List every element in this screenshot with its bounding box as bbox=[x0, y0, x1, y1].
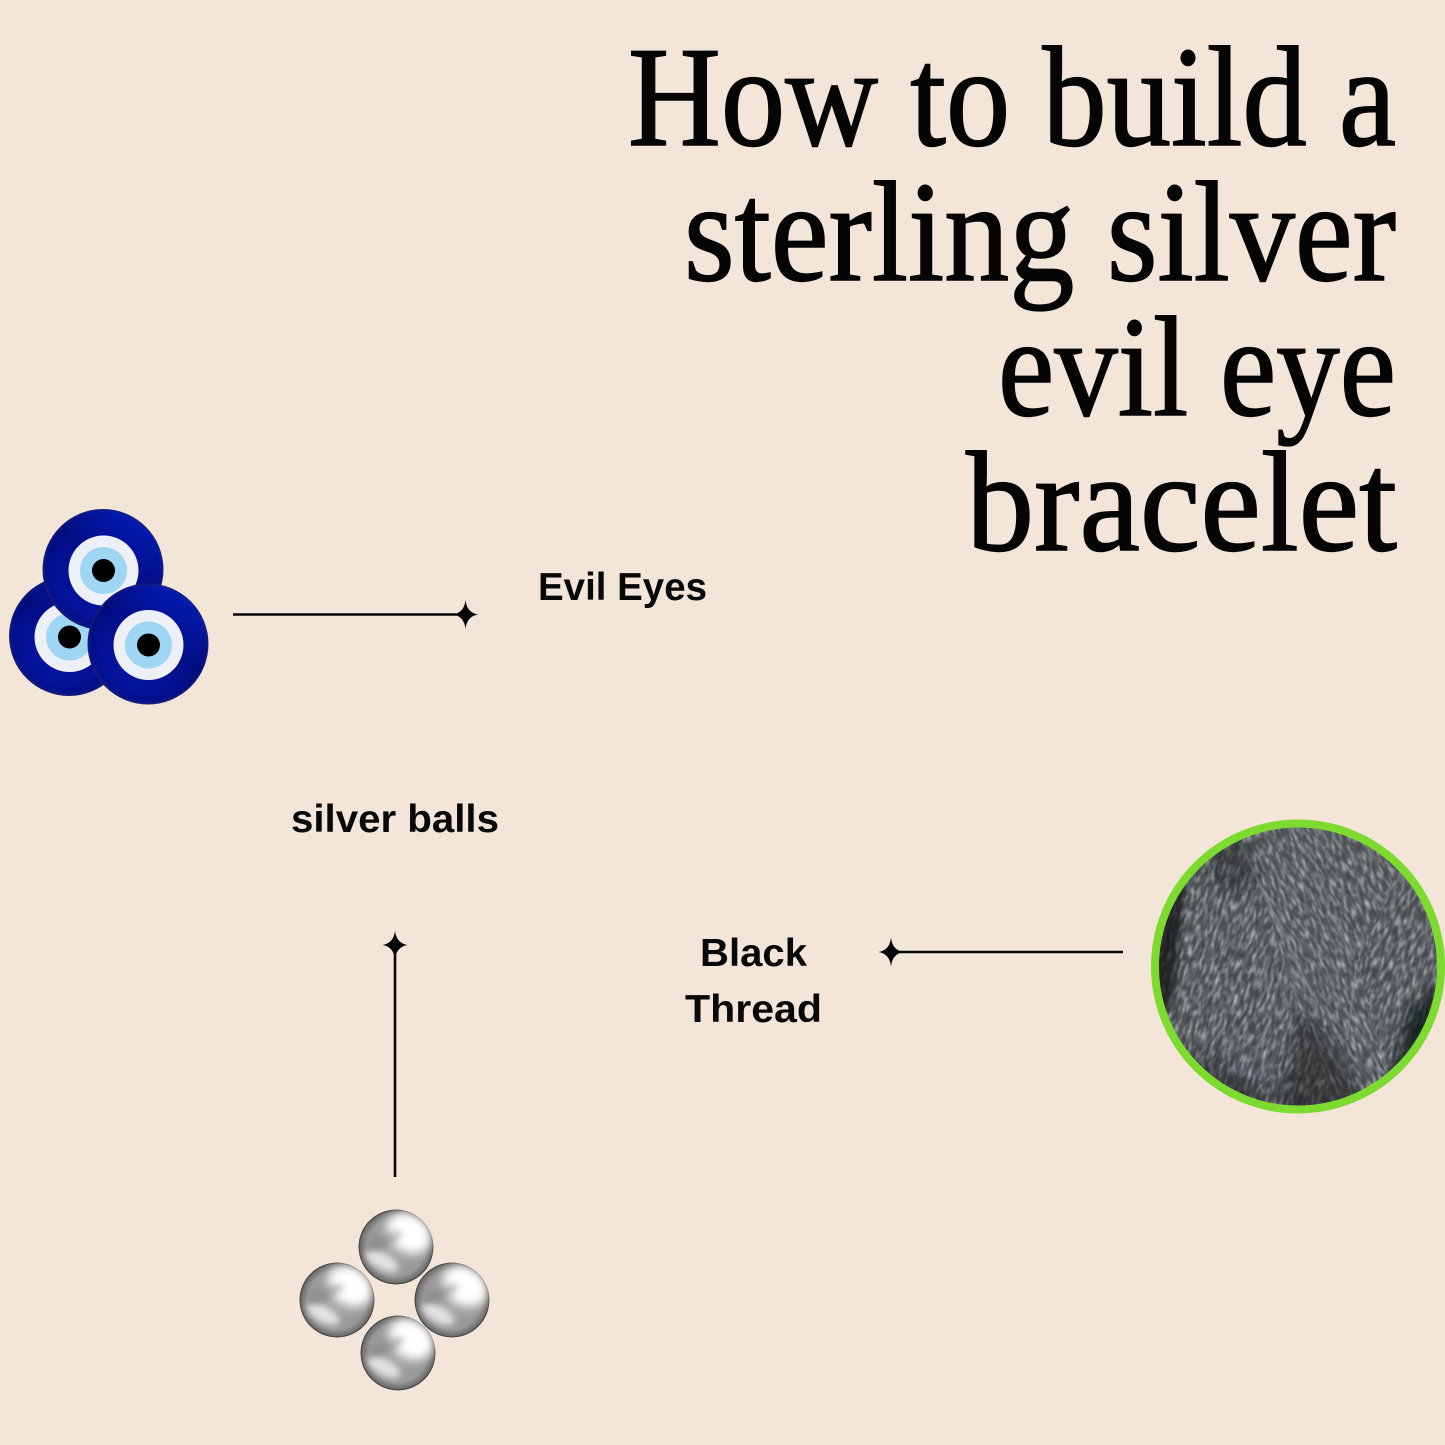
label: silver balls: silver balls bbox=[291, 798, 499, 841]
bead: left bbox=[9, 576, 129, 696]
icon: black thread spool bbox=[1151, 820, 1445, 1114]
bead: right bbox=[88, 584, 208, 704]
label: black thread bbox=[685, 932, 822, 1031]
title: sterling silver bbox=[684, 153, 1396, 311]
label: evil eyes: Evil Eyes bbox=[538, 566, 707, 609]
title bbox=[628, 18, 1397, 581]
arrow: evil eyes bbox=[233, 600, 478, 629]
arrow: black thread bbox=[878, 938, 1123, 966]
green ring bbox=[1155, 824, 1441, 1110]
label: black thread: Thread bbox=[685, 988, 822, 1031]
label: black thread: Black bbox=[700, 932, 807, 975]
title: bracelet bbox=[966, 423, 1397, 581]
icon: evil eye beads bbox=[9, 509, 208, 704]
bead: top bbox=[42, 509, 164, 630]
icon: silver balls bbox=[300, 1204, 496, 1390]
arrow: silver balls bbox=[382, 930, 408, 1177]
title: evil eye bbox=[998, 288, 1396, 446]
